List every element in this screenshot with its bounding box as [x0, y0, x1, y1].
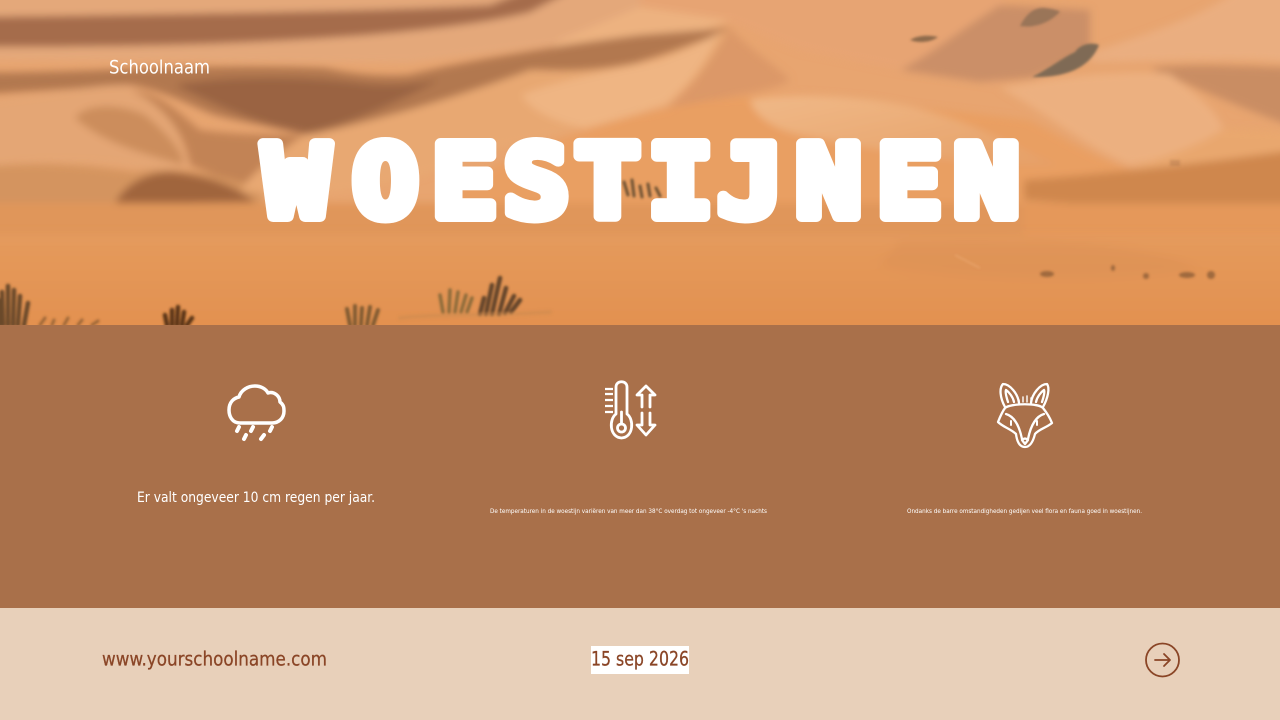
foreground	[0, 203, 1280, 240]
right dark band	[1024, 148, 1280, 209]
upper right slopes	[900, 5, 1090, 82]
website: www.yourschoolname.com	[102, 648, 327, 670]
desert grass tufts	[0, 180, 660, 325]
far dunes	[0, 0, 636, 62]
footer	[0, 608, 1280, 720]
dark rocks on the slopes	[910, 8, 1099, 77]
text: flora and fauna: Ondanks de barre omstandigheden gedijen veel flora en fauna goed in woestijnen.	[907, 507, 1142, 515]
icon: rain cloud	[229, 386, 284, 439]
icon: arrow in circle	[1146, 644, 1179, 676]
date: 15 sep 2026	[591, 648, 689, 670]
big right dune	[462, 96, 1120, 202]
panel: facts	[0, 325, 1280, 608]
school name: Schoolnaam	[109, 56, 210, 78]
text: temperatures: De temperaturen in de woestijn variëren van meer dan 38°C overdag tot ongeveer -4°C 's nachts	[490, 507, 767, 515]
icon: fox	[998, 384, 1052, 447]
title: WOESTIJNEN	[263, 124, 1019, 240]
distant dune marks	[955, 160, 1215, 279]
hero photo: desert dunes	[0, 0, 1280, 350]
left bump dune	[94, 85, 118, 90]
center dunes	[242, 68, 601, 193]
icon: thermometer with arrows	[605, 382, 655, 438]
text: rainfall: Er valt ongeveer 10 cm regen per jaar.	[137, 490, 375, 506]
